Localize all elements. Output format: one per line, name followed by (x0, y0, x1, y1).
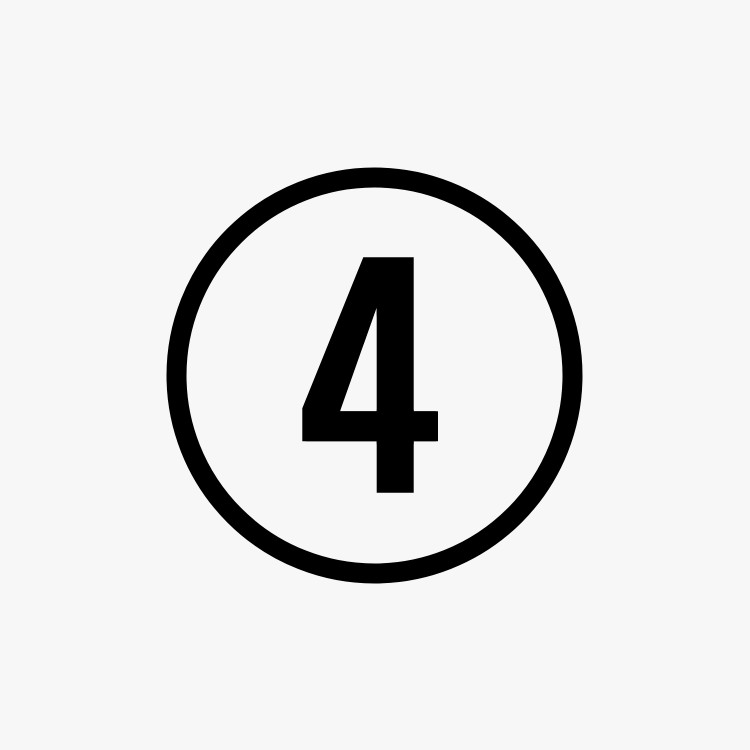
icon: circle outline (176, 178, 572, 574)
number 4: 4 (302, 186, 439, 564)
numbered badge: 4 (166, 168, 582, 584)
